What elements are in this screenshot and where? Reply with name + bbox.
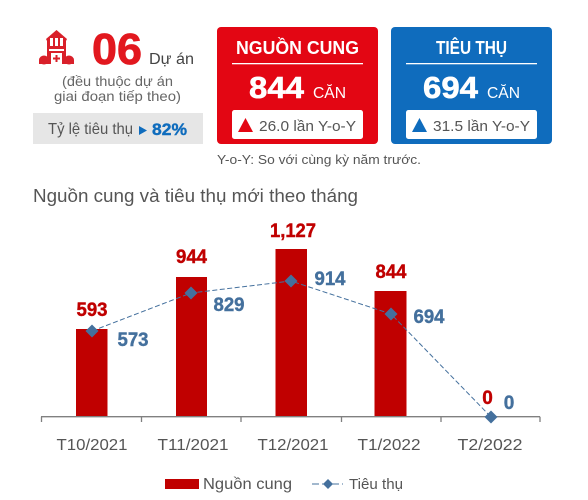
axis — [41, 417, 540, 422]
panel: supply: NGUỒN CUNG — [236, 37, 359, 58]
panel: sales: TIÊU THỤ — [436, 37, 507, 58]
supply values — [76, 221, 493, 409]
month labels: T1/2022 — [358, 437, 421, 454]
sales markers — [86, 274, 498, 424]
panel: supply: CĂN — [313, 83, 346, 102]
legend — [165, 476, 403, 493]
footnote: Y-o-Y: So với cùng kỳ năm trước. — [217, 152, 421, 167]
panel: sales: 694 — [423, 70, 479, 105]
panel: absorption rate: 82% — [152, 120, 187, 139]
project note — [54, 73, 181, 104]
legend: Nguồn cung — [203, 476, 292, 493]
supply bars — [76, 249, 406, 416]
month labels — [56, 437, 523, 454]
supply values: 944 — [176, 247, 207, 268]
supply values: 0 — [482, 388, 493, 409]
panel: absorption rate: Tỷ lệ tiêu thụ — [48, 121, 133, 138]
project unit: Dự án — [149, 51, 194, 68]
supply values: 844 — [376, 262, 407, 283]
chart title: Nguồn cung và tiêu thụ mới theo tháng — [33, 186, 358, 206]
sales line — [92, 281, 491, 417]
panel: supply — [217, 27, 378, 144]
month labels: T12/2021 — [258, 437, 329, 454]
panel: sales: CĂN — [487, 83, 520, 102]
bar chart: monthly supply and sales — [41, 221, 540, 454]
sales values: 0 — [504, 393, 514, 414]
project count: 06 — [92, 25, 142, 74]
panel: project summary — [33, 25, 203, 144]
month labels: T11/2021 — [158, 437, 229, 454]
supply values: 593 — [76, 300, 108, 321]
month labels: T10/2021 — [56, 437, 128, 454]
panel: supply: 844 — [249, 70, 305, 105]
project note: (đều thuộc dự án — [62, 73, 173, 89]
month labels: T2/2022 — [458, 437, 523, 454]
legend: Tiêu thụ — [349, 476, 403, 493]
panel: sales: 31.5 lần Y-o-Y — [433, 118, 530, 135]
sales values: 829 — [214, 295, 244, 316]
sales values — [118, 269, 514, 414]
panel: sales — [391, 27, 552, 144]
project note: giai đoạn tiếp theo) — [54, 88, 181, 104]
panel: absorption rate — [33, 113, 203, 144]
icon: hospital building — [39, 30, 74, 64]
supply values: 1,127 — [270, 221, 316, 242]
sales values: 573 — [118, 330, 148, 351]
panel: supply: 26.0 lần Y-o-Y — [259, 118, 356, 135]
sales values: 914 — [314, 269, 346, 290]
sales values: 694 — [414, 307, 445, 328]
